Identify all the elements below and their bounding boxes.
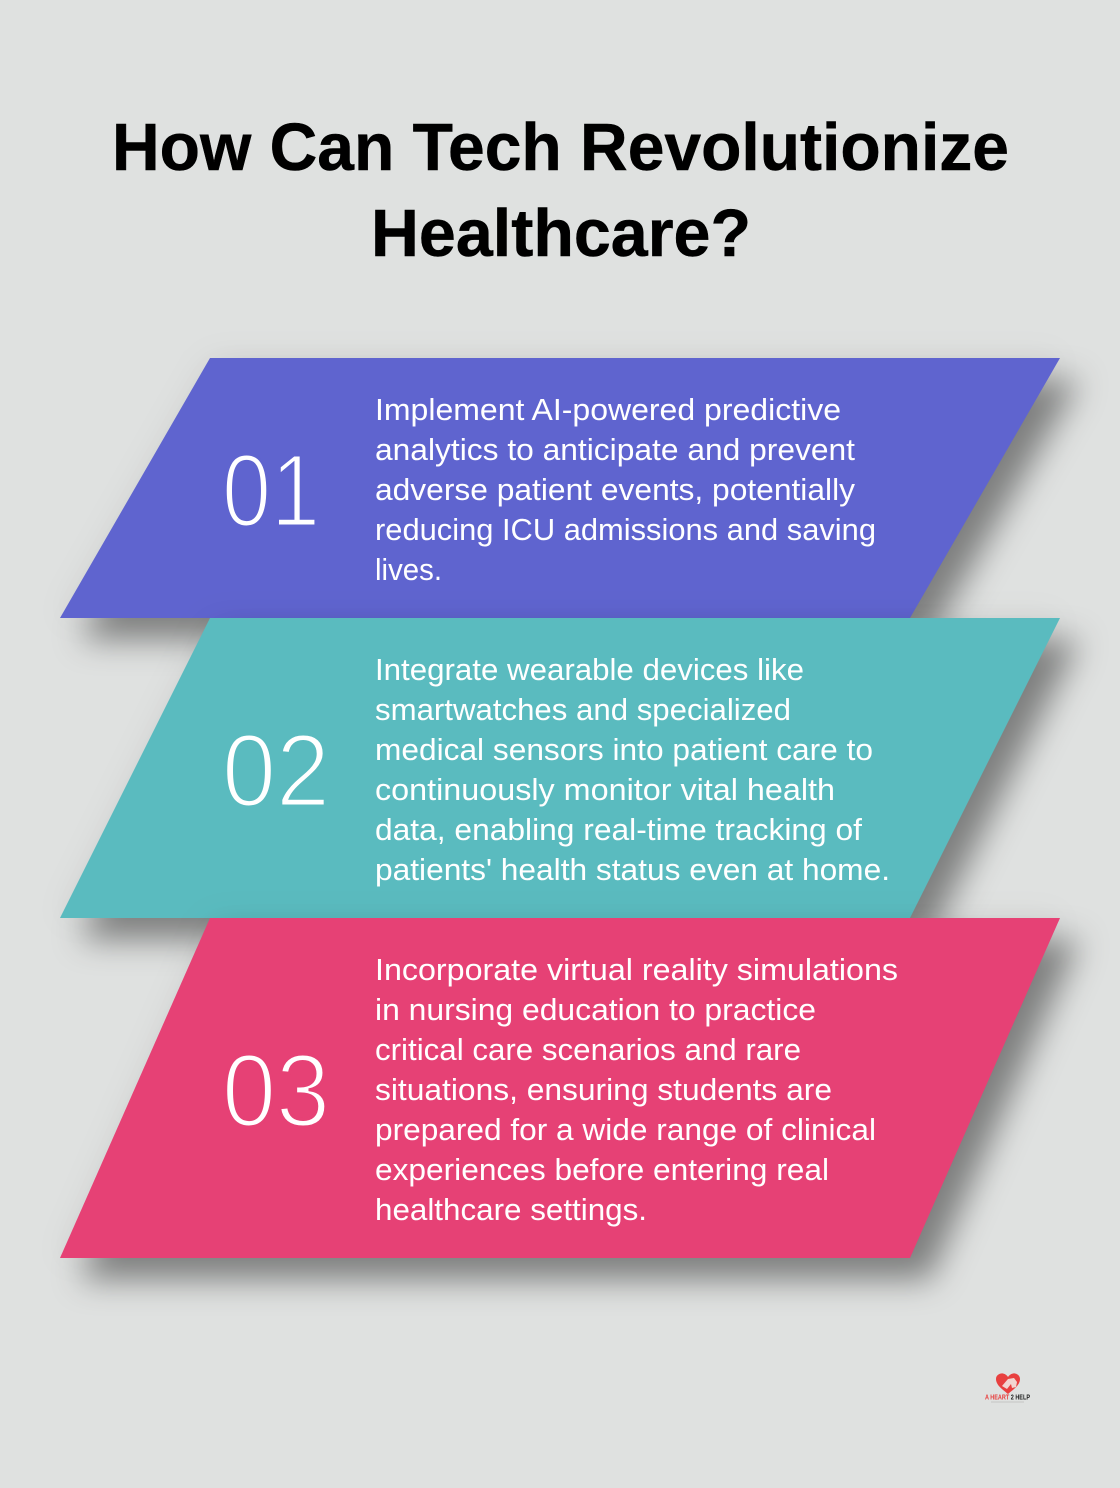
text: step 01: lives. bbox=[375, 552, 442, 587]
text: step 03 bbox=[375, 952, 898, 1227]
text: step 03: in nursing education to practice bbox=[375, 992, 816, 1027]
panel: step 01 bbox=[60, 358, 1080, 640]
title: How Can Tech Revolutionize bbox=[112, 110, 1009, 185]
text: step 03: Incorporate virtual reality simulations bbox=[375, 952, 898, 987]
text: step 02: Integrate wearable devices like bbox=[375, 652, 804, 687]
text: step 02: continuously monitor vital health bbox=[375, 772, 835, 807]
icon: heart bbox=[996, 1373, 1020, 1394]
title: Healthcare? bbox=[371, 196, 751, 271]
text: step 02: patients' health status even at home. bbox=[375, 852, 890, 887]
text: step 02: medical sensors into patient care to bbox=[375, 732, 873, 767]
text: step 01: adverse patient events, potentially bbox=[375, 472, 856, 507]
text: step 03: experiences before entering real bbox=[375, 1152, 829, 1187]
text: step 03: situations, ensuring students are bbox=[375, 1072, 832, 1107]
panel: step 02 bbox=[60, 618, 1080, 940]
text: step 02: data, enabling real-time tracking of bbox=[375, 812, 862, 847]
text: step 02: smartwatches and specialized bbox=[375, 692, 791, 727]
title bbox=[112, 110, 1009, 271]
text: step 01: reducing ICU admissions and saving bbox=[375, 512, 876, 547]
text: step 02 bbox=[375, 652, 890, 887]
text: step 01 bbox=[375, 392, 876, 587]
logo: A Heart 2 Help: A HEART 2 HELP bbox=[985, 1394, 1030, 1402]
logo: A Heart 2 Help bbox=[985, 1373, 1030, 1402]
number 03: 03 bbox=[222, 1033, 330, 1148]
text: step 01: Implement AI-powered predictive bbox=[375, 392, 841, 427]
number 02: 02 bbox=[222, 713, 330, 828]
number 01: 01 bbox=[222, 433, 320, 548]
text: step 01: analytics to anticipate and prevent bbox=[375, 432, 855, 467]
text: step 03: prepared for a wide range of clinical bbox=[375, 1112, 876, 1147]
text: step 03: healthcare settings. bbox=[375, 1192, 647, 1227]
text: step 03: critical care scenarios and rare bbox=[375, 1032, 801, 1067]
panel: step 03 bbox=[60, 918, 1080, 1280]
